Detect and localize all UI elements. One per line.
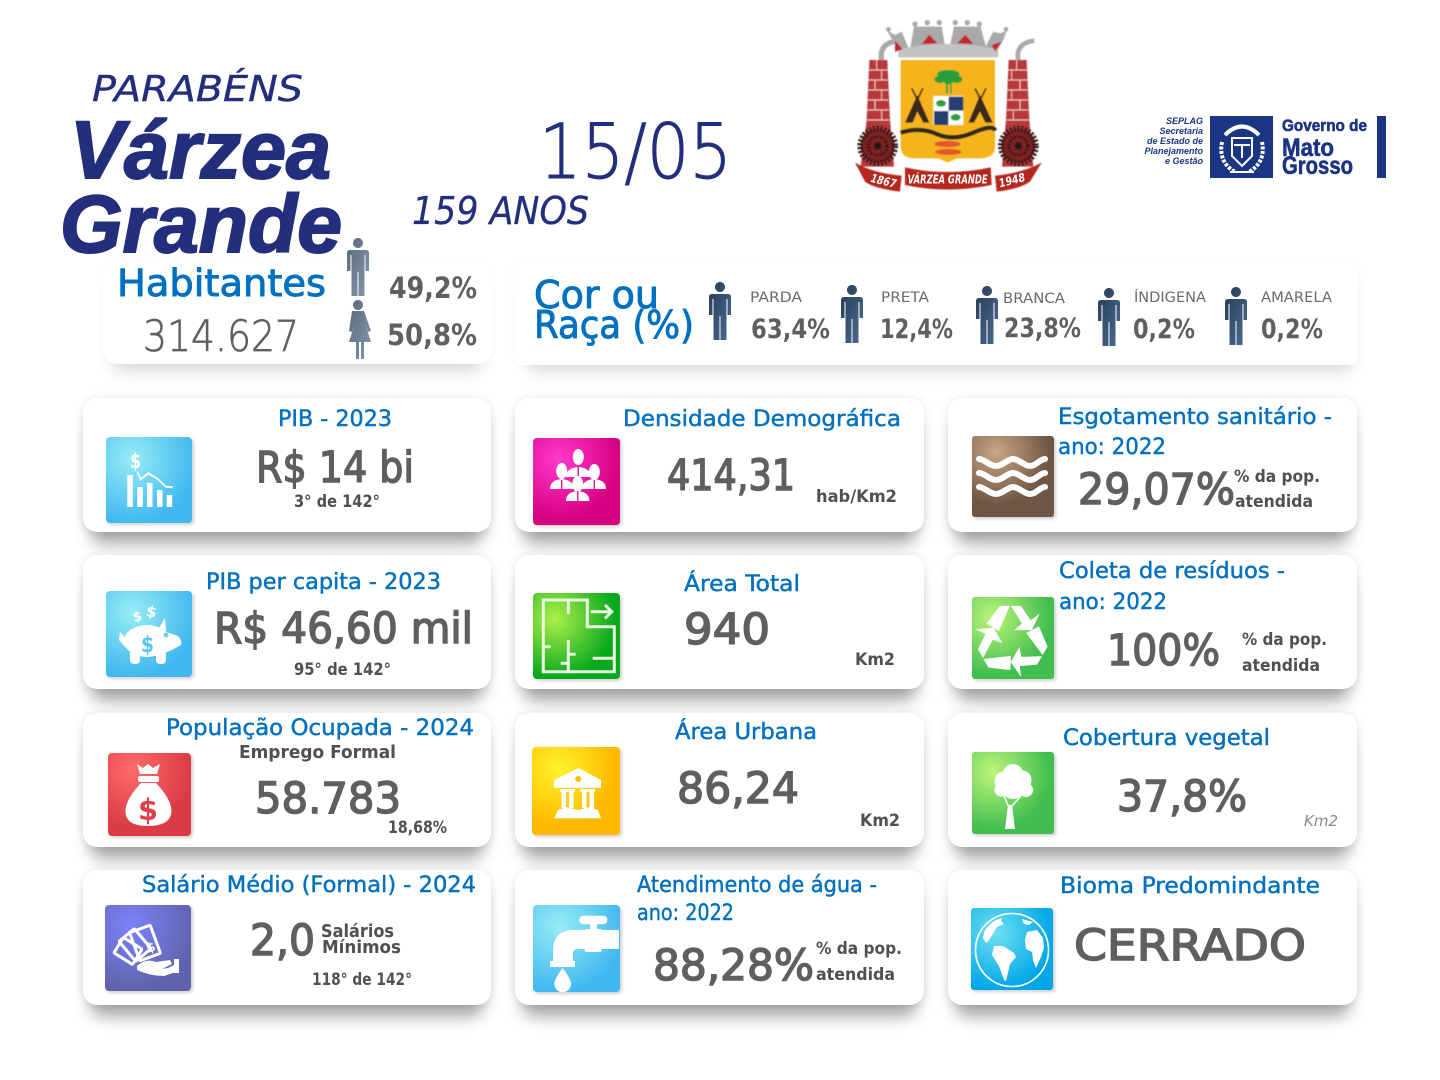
title: Esgotamento sanitário - <box>1058 405 1332 430</box>
subtitle: Emprego Formal <box>239 742 396 763</box>
cor ou raça heading: Raça (%) <box>534 303 694 347</box>
title: Atendimento de água - <box>637 873 877 898</box>
population number: 314.627 <box>143 312 299 362</box>
card: bioma predominante <box>948 870 1357 1017</box>
title: Bioma Predomindante <box>1060 874 1320 899</box>
card: salário médio <box>83 870 491 1017</box>
title <box>637 873 877 926</box>
seplag text: Secretaria <box>1159 126 1203 136</box>
coat of arms: VÁRZEA GRANDE <box>908 172 988 187</box>
card: densidade demográfica <box>515 398 924 544</box>
title: várzea grande: Grande <box>60 179 342 270</box>
title: Coleta de resíduos - <box>1059 559 1285 584</box>
card: área urbana <box>515 713 924 859</box>
rank: 118° de 142° <box>312 970 412 990</box>
icon: recycle <box>969 597 1056 681</box>
icon: floor plan <box>533 593 622 681</box>
unit <box>321 921 401 958</box>
title: várzea grande: Várzea <box>70 105 331 196</box>
unit: % da pop. <box>1242 630 1327 650</box>
seplag text: Planejamento <box>1144 146 1203 156</box>
title <box>1058 405 1332 460</box>
title: Salário Médio (Formal) - 2024 <box>142 873 476 898</box>
race: indígena: 0,2% <box>1133 314 1195 345</box>
unit: Salários <box>321 921 394 942</box>
unit: hab/Km2 <box>816 487 897 507</box>
value: 29,07% <box>1078 465 1235 515</box>
value: 100% <box>1107 626 1220 676</box>
mato grosso: Grosso <box>1282 152 1353 180</box>
race: parda <box>709 282 830 345</box>
race: branca <box>976 286 1081 344</box>
cor ou raça heading: Cor ou <box>534 273 659 317</box>
share: 18,68% <box>388 818 447 838</box>
icon: waves <box>972 436 1056 519</box>
cor ou raça heading <box>534 273 694 347</box>
card: esgotamento sanitário <box>948 398 1357 544</box>
logo: seplag governo de mato grosso <box>1144 116 1386 180</box>
seplag text: e Gestão <box>1165 156 1203 166</box>
coat of arms: 1948 <box>997 170 1027 190</box>
anniversary: 159 ANOS <box>412 189 589 233</box>
panel: habitantes <box>103 262 492 372</box>
value: 58.783 <box>255 774 401 824</box>
unit: atendida <box>816 965 895 985</box>
title: População Ocupada - 2024 <box>166 716 474 741</box>
title: ano: 2022 <box>1058 435 1166 460</box>
mato grosso: Mato <box>1282 134 1334 162</box>
icon: woman <box>349 300 371 359</box>
icon: people <box>533 438 622 527</box>
icon: piggy bank: $ <box>145 602 158 622</box>
card: atendimento de água <box>515 870 924 1017</box>
icon: water tap <box>533 905 622 994</box>
card: pib <box>83 398 491 544</box>
panel: cor ou raça <box>514 262 1358 372</box>
title: Área Total <box>684 571 800 597</box>
icon: money bag: $ <box>138 793 158 827</box>
title <box>1059 559 1285 615</box>
icon: piggy bank: $ <box>132 609 144 626</box>
title: parabéns: PARABÉNS <box>92 68 303 110</box>
icon: money bag <box>108 753 193 838</box>
state emblem <box>1221 126 1263 172</box>
value: 414,31 <box>667 451 795 501</box>
race: branca: BRANCA <box>1003 291 1065 307</box>
unit <box>816 939 902 985</box>
title: ano: 2022 <box>1059 590 1167 615</box>
title: Cobertura vegetal <box>1063 726 1270 751</box>
race: branca: 23,8% <box>1004 313 1081 344</box>
icon: bar chart with dollar <box>106 437 194 525</box>
habitantes heading: Habitantes <box>117 262 326 305</box>
male share: 49,2% <box>389 271 477 305</box>
icon: piggy bank <box>106 591 194 679</box>
title: Área Urbana <box>675 719 817 745</box>
card: área total <box>515 555 924 701</box>
unit: Km2 <box>860 811 900 831</box>
unit: % da pop. <box>816 939 902 959</box>
race: parda: 63,4% <box>751 314 830 345</box>
race: amarela <box>1225 287 1332 345</box>
card: cobertura vegetal <box>948 713 1357 859</box>
mato grosso <box>1282 134 1353 180</box>
governo de: Governo de <box>1282 116 1367 135</box>
title: PIB - 2023 <box>278 407 392 432</box>
unit: Km2 <box>855 650 895 670</box>
title: PIB per capita - 2023 <box>206 570 441 595</box>
icon: cash in hand: $ <box>144 940 158 957</box>
race: amarela: AMARELA <box>1261 290 1332 306</box>
icon: bar chart with dollar: $ <box>130 449 141 473</box>
coat of arms: 1867 <box>869 171 899 191</box>
icon: globe <box>971 908 1055 992</box>
unit <box>1242 630 1327 676</box>
icon: piggy bank: $ <box>141 633 154 658</box>
female share: 50,8% <box>387 318 477 352</box>
value: 37,8% <box>1117 772 1247 822</box>
unit: Km2 <box>1304 812 1338 830</box>
title: Densidade Demográfica <box>623 407 901 432</box>
title: ano: 2022 <box>637 901 734 926</box>
value: R$ 14 bi <box>256 443 414 493</box>
icon: man <box>347 238 369 296</box>
card: coleta de resíduos <box>948 555 1357 701</box>
unit: Mínimos <box>322 937 401 958</box>
race: preta: 12,4% <box>880 314 953 345</box>
title: várzea grande <box>60 105 342 270</box>
race: indígena <box>1098 288 1206 346</box>
unit: atendida <box>1235 492 1313 512</box>
value: 2,0 <box>250 916 315 966</box>
unit: atendida <box>1242 656 1320 676</box>
seplag text: de Estado de <box>1147 136 1203 146</box>
rank: 3° de 142° <box>294 492 380 512</box>
icon: cash in hand <box>105 905 193 993</box>
value: 88,28% <box>653 941 814 991</box>
coat of arms <box>855 20 1042 192</box>
icon: tree <box>972 752 1056 836</box>
value: 86,24 <box>677 764 799 814</box>
race: preta <box>841 285 953 345</box>
icon: bank building <box>532 747 622 837</box>
rank: 95° de 142° <box>294 660 391 680</box>
race: indígena: ÍNDIGENA <box>1134 289 1206 306</box>
date: 15/05 <box>539 107 732 196</box>
seplag text <box>1144 116 1203 166</box>
value: R$ 46,60 mil <box>214 604 473 654</box>
race: preta: PRETA <box>881 290 929 306</box>
race: parda: PARDA <box>750 290 802 306</box>
race: amarela: 0,2% <box>1261 314 1323 345</box>
seplag text: SEPLAG <box>1166 116 1203 126</box>
value: 940 <box>684 605 770 655</box>
unit <box>1234 467 1320 512</box>
card: população ocupada <box>83 713 491 859</box>
value: CERRADO <box>1074 921 1306 971</box>
card: pib per capita <box>83 555 491 701</box>
unit: % da pop. <box>1234 467 1320 487</box>
